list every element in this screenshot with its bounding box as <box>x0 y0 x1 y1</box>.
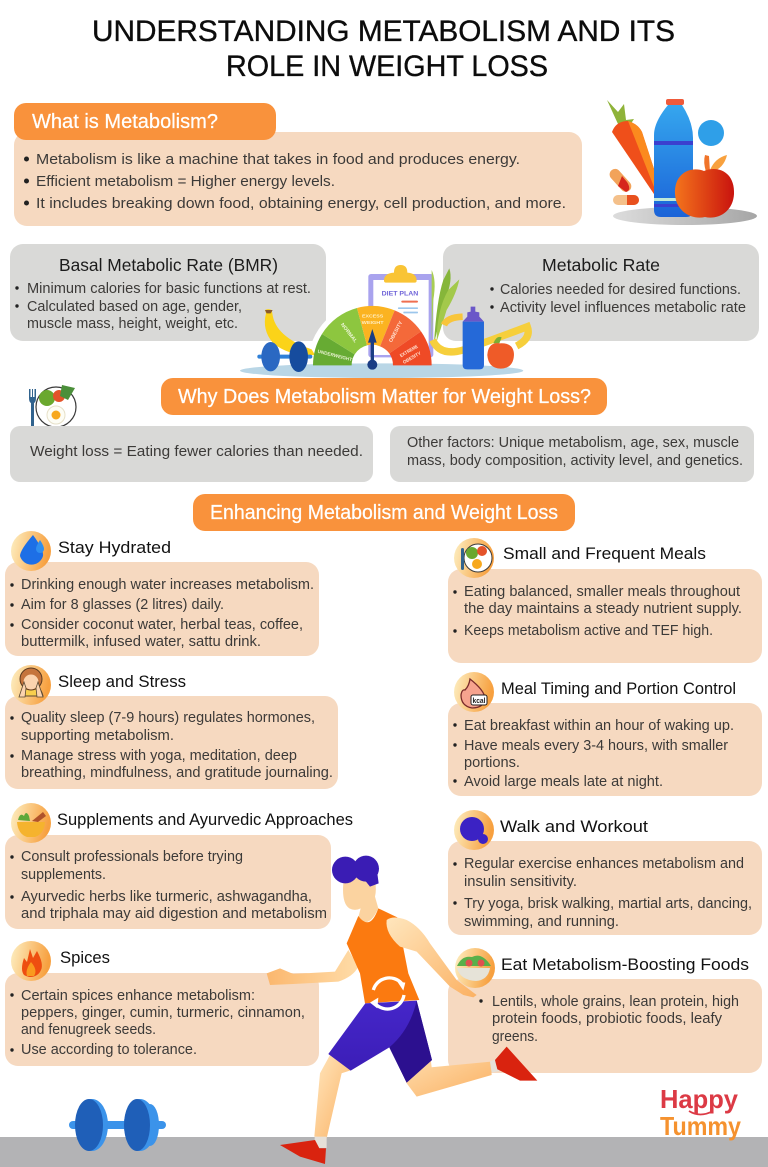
text block: hydration bullets: buttermilk, infused water, sattu drink. <box>21 633 261 650</box>
chart: BMI gauge with diet plan, banana, dumbbell, bottle and tape: DIET PLAN <box>382 291 419 298</box>
heading: supplements: Supplements and Ayurvedic Approaches <box>57 810 353 829</box>
text block: sleep bullets: Manage stress with yoga, meditation, deep <box>21 747 297 764</box>
text block: hydration bullets: Drinking enough water increases metabolism. <box>21 576 314 593</box>
panel: spices <box>5 941 319 1066</box>
panel: supplements and ayurvedic approaches <box>5 803 353 929</box>
icon: flame <box>11 941 51 981</box>
runner head and neck <box>332 856 379 922</box>
gauge wedges: WEIGHT <box>362 320 384 326</box>
panel: other factors <box>390 426 754 482</box>
panel: small and frequent meals <box>448 538 762 663</box>
text block: spices bullets: Use according to tolerance. <box>21 1041 197 1058</box>
text block: sleep bullets: breathing, mindfulness, and gratitude journaling. <box>21 764 333 781</box>
panel: meal timing and portion control <box>448 672 762 796</box>
title <box>92 15 675 83</box>
text block: timing bullets: portions. <box>464 754 520 771</box>
text block: spices bullets: peppers, ginger, cumin, turmeric, cinnamon, <box>21 1004 305 1021</box>
text block: foods bullets: greens. <box>492 1028 538 1045</box>
logo: Happy Tummy <box>660 1084 741 1141</box>
text block: metabolism bullets: Metabolism is like a machine that takes in food and produces energy. <box>36 151 520 168</box>
text block: BMR bullets <box>15 280 311 332</box>
text block: metabolism bullets: It includes breaking down food, obtaining energy, cell production, and more. <box>36 195 566 212</box>
heading banner: enhancing metabolism <box>193 494 575 531</box>
text block: metabolic rate bullets: Activity level influences metabolic rate <box>500 299 746 316</box>
icon: meal plate <box>454 538 494 578</box>
text block: meals bullets <box>453 583 742 639</box>
panel: walk and workout <box>448 810 762 935</box>
text block: workout bullets: swimming, and running. <box>464 913 619 930</box>
chart: BMI gauge with diet plan, banana, dumbbell, bottle and tape <box>240 260 528 430</box>
icon: stressed person <box>11 665 51 705</box>
panel: what is metabolism <box>14 103 582 226</box>
heading banner: enhancing metabolism: Enhancing Metabolism and Weight Loss <box>210 502 558 524</box>
text block: sleep bullets: supporting metabolism. <box>21 727 174 744</box>
icon: kcal flame: kcal <box>472 698 486 705</box>
gauge wedges: OBESITY <box>388 320 405 344</box>
text block: hydration bullets <box>10 576 314 650</box>
logo: Happy Tummy: Tummy <box>660 1111 741 1141</box>
heading: eat foods: Eat Metabolism-Boosting Foods <box>501 955 749 974</box>
icon: water drop <box>11 531 51 571</box>
heading: metabolic rate: Metabolic Rate <box>542 255 660 275</box>
gauge wedges: OBESITY <box>402 350 423 365</box>
text block: BMR bullets: Calculated based on age, gender, <box>27 298 242 315</box>
icon: herb bowl <box>11 803 51 843</box>
icon: metabolism cycle arrows <box>370 978 405 1009</box>
panel: other factors: mass, body composition, activity level, and genetics. <box>407 452 743 469</box>
text block: hydration bullets: Aim for 8 glasses (2 litres) daily. <box>21 596 224 613</box>
text block: workout bullets <box>453 855 752 930</box>
panel: metabolic rate <box>443 244 759 341</box>
text block: meals bullets: Keeps metabolism active and TEF high. <box>464 622 713 639</box>
text block: sleep bullets: Quality sleep (7-9 hours) regulates hormones, <box>21 709 315 726</box>
title: ROLE IN WEIGHT LOSS <box>226 50 548 83</box>
heading banner: why does metabolism matter <box>161 378 607 415</box>
text block: workout bullets: Try yoga, brisk walking, martial arts, dancing, <box>464 895 752 912</box>
gauge wedges: UNDERWEIGHT <box>317 349 353 362</box>
text block: workout bullets: insulin sensitivity. <box>464 873 577 890</box>
heading: meal timing: Meal Timing and Portion Control <box>501 679 736 698</box>
icon: salad bowl <box>455 948 495 988</box>
text block: workout bullets: Regular exercise enhances metabolism and <box>464 855 744 872</box>
text block: BMR bullets: Minimum calories for basic functions at rest. <box>27 280 311 297</box>
text block: foods bullets <box>479 993 739 1045</box>
heading banner: why does metabolism matter: Why Does Metabolism Matter for Weight Loss? <box>178 386 591 408</box>
gauge wedges: EXTREME <box>399 344 419 358</box>
text block: supplement bullets: and triphala may aid digestion and metabolism <box>21 905 327 922</box>
text block: spices bullets <box>10 987 305 1058</box>
heading: stay hydrated: Stay Hydrated <box>58 538 171 557</box>
text block: metabolism bullets <box>24 151 566 212</box>
gauge wedges: EXCESS <box>362 313 384 319</box>
text block: timing bullets <box>453 717 734 790</box>
runner shorts <box>328 1001 432 1083</box>
panel: basal metabolic rate <box>10 244 326 341</box>
illustration: running man <box>267 856 537 1164</box>
heading: small and frequent meals: Small and Frequent Meals <box>503 544 706 563</box>
heading: BMR: Basal Metabolic Rate (BMR) <box>59 255 278 275</box>
runner rear arm <box>267 950 358 985</box>
text block: supplement bullets <box>10 848 327 922</box>
text block: metabolic rate bullets: Calories needed for desired functions. <box>500 281 741 298</box>
text block: timing bullets: Avoid large meals late at night. <box>464 773 663 790</box>
text block: timing bullets: Eat breakfast within an hour of waking up. <box>464 717 734 734</box>
icon: carrot, water bottle and apple <box>607 99 757 225</box>
text block: metabolism bullets: Efficient metabolism = Higher energy levels. <box>36 173 335 190</box>
icon: blue circles <box>454 810 494 850</box>
heading: what is metabolism: What is Metabolism? <box>32 111 218 133</box>
icon: dumbbell <box>69 1099 166 1151</box>
gauge wedges <box>313 306 432 365</box>
panel: sleep and stress <box>5 665 338 789</box>
text block: hydration bullets: Consider coconut water, herbal teas, coffee, <box>21 616 303 633</box>
panel: weight loss equation: Weight loss = Eating fewer calories than needed. <box>30 443 363 460</box>
heading: spices: Spices <box>60 948 110 967</box>
text block: timing bullets: Have meals every 3-4 hours, with smaller <box>464 737 728 754</box>
logo: Happy Tummy: Happy <box>660 1084 739 1114</box>
runner front arm <box>386 917 477 997</box>
text block: foods bullets: Lentils, whole grains, lean protein, high <box>492 993 739 1010</box>
title: UNDERSTANDING METABOLISM AND ITS <box>92 15 675 48</box>
panel: eat metabolism-boosting foods <box>448 948 762 1073</box>
heading: walk and workout: Walk and Workout <box>500 817 648 836</box>
text block: sleep bullets <box>10 709 333 781</box>
runner shirt <box>347 908 419 1003</box>
icon: kcal flame <box>454 672 494 712</box>
text block: meals bullets: Eating balanced, smaller meals throughout <box>464 583 741 600</box>
heading: sleep and stress: Sleep and Stress <box>58 672 186 691</box>
text block: supplement bullets: supplements. <box>21 866 106 883</box>
panel: other factors: Other factors: Unique metabolism, age, sex, muscle <box>407 434 739 451</box>
icon: fork and meal plate <box>29 385 76 430</box>
text block: metabolic rate bullets <box>490 281 746 316</box>
text block: spices bullets: Certain spices enhance metabolism: <box>21 987 255 1004</box>
panel: stay hydrated <box>5 531 319 656</box>
runner legs <box>280 1047 537 1164</box>
text block: supplement bullets: Consult professionals before trying <box>21 848 243 865</box>
text block: BMR bullets: muscle mass, height, weight, etc. <box>27 315 238 332</box>
gauge wedges: NORMAL <box>339 322 358 344</box>
text block: foods bullets: protein foods, probiotic foods, leafy <box>492 1010 722 1027</box>
text block: spices bullets: and fenugreek seeds. <box>21 1021 156 1038</box>
text block: supplement bullets: Ayurvedic herbs like turmeric, ashwagandha, <box>21 888 312 905</box>
panel: weight loss equation <box>10 426 373 482</box>
text block: meals bullets: the day maintains a steady nutrient supply. <box>464 600 742 617</box>
floor band <box>0 1137 768 1167</box>
